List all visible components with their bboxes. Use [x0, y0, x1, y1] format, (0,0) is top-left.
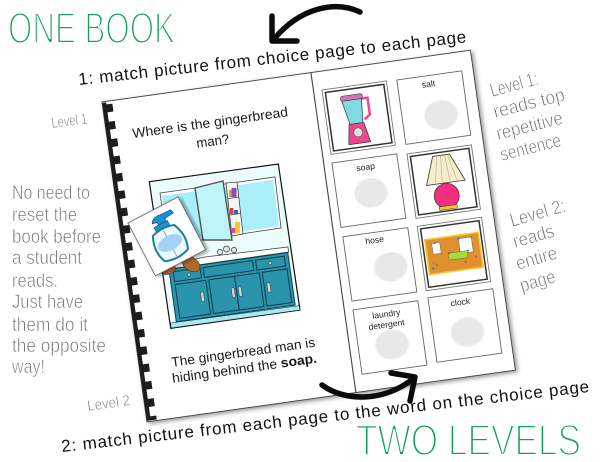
- card: laundry detergent: [353, 301, 427, 374]
- answer text: hiding behind the soap.: [171, 351, 318, 386]
- pins: [428, 236, 478, 270]
- card: clock: [428, 289, 502, 362]
- card: hose: hose: [365, 234, 385, 246]
- title: one book: ONE BOOK: [8, 4, 175, 53]
- note: level 1 explanation: [488, 69, 567, 166]
- blender handle: [361, 98, 370, 119]
- label: level 1: Level 1: [50, 111, 88, 132]
- note: left paragraph: them do it: [12, 315, 89, 336]
- note: left paragraph: a student: [12, 248, 83, 269]
- notes: [432, 237, 474, 262]
- card: soap: soap: [356, 161, 376, 173]
- blender dial: [353, 127, 363, 137]
- card: corkboard picture: [417, 217, 491, 291]
- note: left paragraph: the opposite: [12, 336, 106, 357]
- note: level 2 explanation: entire: [514, 243, 560, 275]
- window glass: [162, 180, 279, 242]
- answer text: [169, 335, 319, 386]
- soap stem: [163, 230, 177, 256]
- shelves: [226, 182, 243, 236]
- note: left paragraph: book before: [12, 227, 101, 248]
- book: [102, 50, 515, 422]
- answer text: The gingerbread man is: [170, 335, 316, 370]
- window frame: [160, 177, 281, 245]
- floor strip: [171, 306, 300, 328]
- question text: man?: [195, 131, 230, 151]
- arrow: top curved arrow: [272, 7, 360, 41]
- gingerbread man feet: [161, 253, 203, 276]
- note: left paragraph: [11, 183, 106, 378]
- note: left paragraph: No need to: [12, 183, 90, 204]
- faucet: [217, 246, 237, 255]
- book spine divider: [311, 73, 356, 392]
- corkboard: [425, 232, 483, 275]
- instruction 2: 2: match picture from each page to the word on the choice page: [60, 377, 590, 456]
- spiral binding: [104, 102, 153, 421]
- note: level 1 explanation: repetitive: [494, 108, 565, 145]
- instruction 1: 1: match picture from choice page to each page: [77, 27, 467, 89]
- note: level 1 explanation: reads top: [491, 85, 567, 123]
- open mirror door: [195, 181, 232, 240]
- card background: [128, 197, 206, 276]
- bathroom scene: [149, 164, 300, 328]
- book page background: [102, 50, 515, 422]
- card: soap: [332, 154, 406, 227]
- note: level 1 explanation: sentence: [498, 130, 563, 166]
- card: salt: [397, 71, 471, 144]
- blender base: [346, 122, 371, 145]
- card: laundry detergent: detergent: [368, 317, 406, 332]
- card: blender picture: [322, 81, 395, 154]
- question text: Where is the gingerbread: [131, 104, 289, 141]
- note: level 1 explanation: Level 1:: [488, 69, 541, 102]
- note: left paragraph: way!: [11, 357, 45, 378]
- arrow: bottom curved arrow: [322, 373, 415, 401]
- lamp base: [433, 182, 461, 210]
- card: hose: [343, 228, 417, 301]
- lamp foot: [439, 204, 458, 210]
- card: lamp picture: [407, 145, 480, 218]
- question text: [131, 104, 292, 160]
- blender lid: [340, 93, 363, 101]
- note: left paragraph: Just have: [12, 292, 83, 313]
- card: laundry detergent: laundry: [372, 307, 402, 321]
- scene frame: [149, 164, 300, 328]
- note: level 2 explanation: [508, 196, 568, 297]
- soap collar: [154, 221, 170, 233]
- picture card: soap: [128, 197, 206, 276]
- note: level 2 explanation: page: [518, 267, 558, 297]
- blender jar: [342, 98, 365, 125]
- cabinet: [169, 253, 295, 322]
- note: left paragraph: reads.: [12, 271, 58, 292]
- card: clock: clock: [450, 296, 471, 308]
- lamp shade: [423, 152, 465, 186]
- counter: [170, 247, 288, 269]
- soap bottle: [149, 221, 192, 265]
- soap label: [155, 230, 185, 256]
- note: level 2 explanation: Level 2:: [508, 196, 568, 232]
- label: level 2: Level 2: [86, 392, 131, 415]
- card: salt: salt: [421, 78, 436, 90]
- note: level 2 explanation: reads: [511, 221, 557, 253]
- note: left paragraph: reset the: [12, 205, 77, 226]
- soap pump: [150, 209, 176, 228]
